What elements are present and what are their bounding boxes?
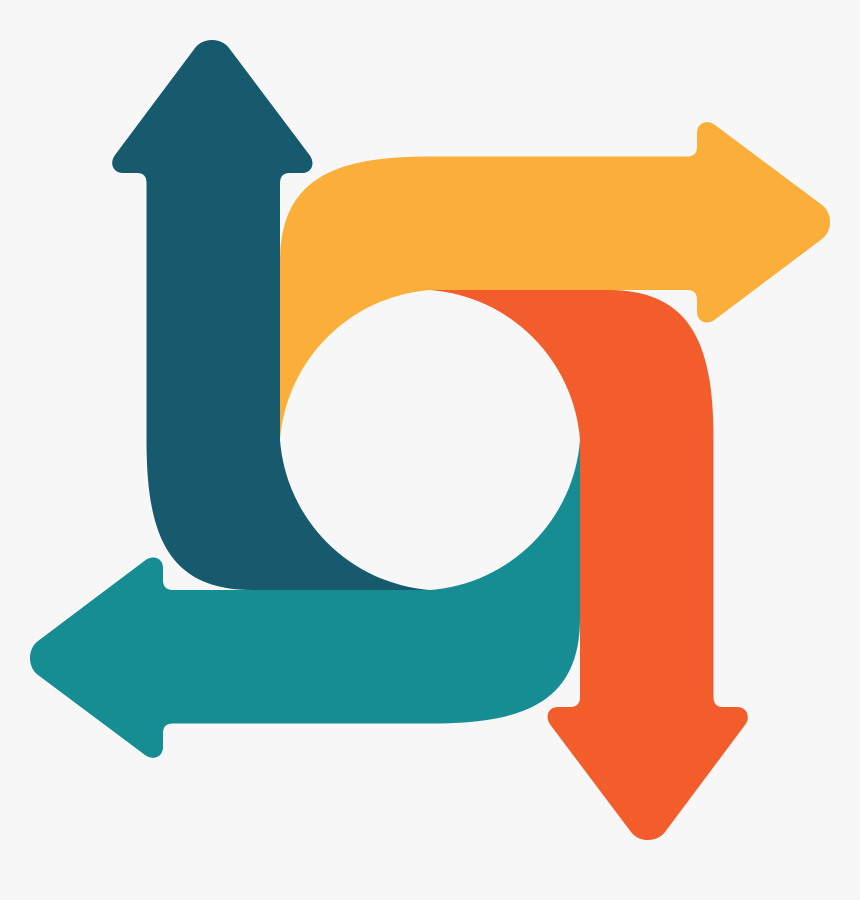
arrow: dark blue pointing up bbox=[112, 40, 430, 590]
arrow: orange pointing down bbox=[430, 290, 748, 840]
arrow: teal pointing left bbox=[30, 440, 580, 758]
arrow: yellow pointing right bbox=[280, 122, 830, 440]
